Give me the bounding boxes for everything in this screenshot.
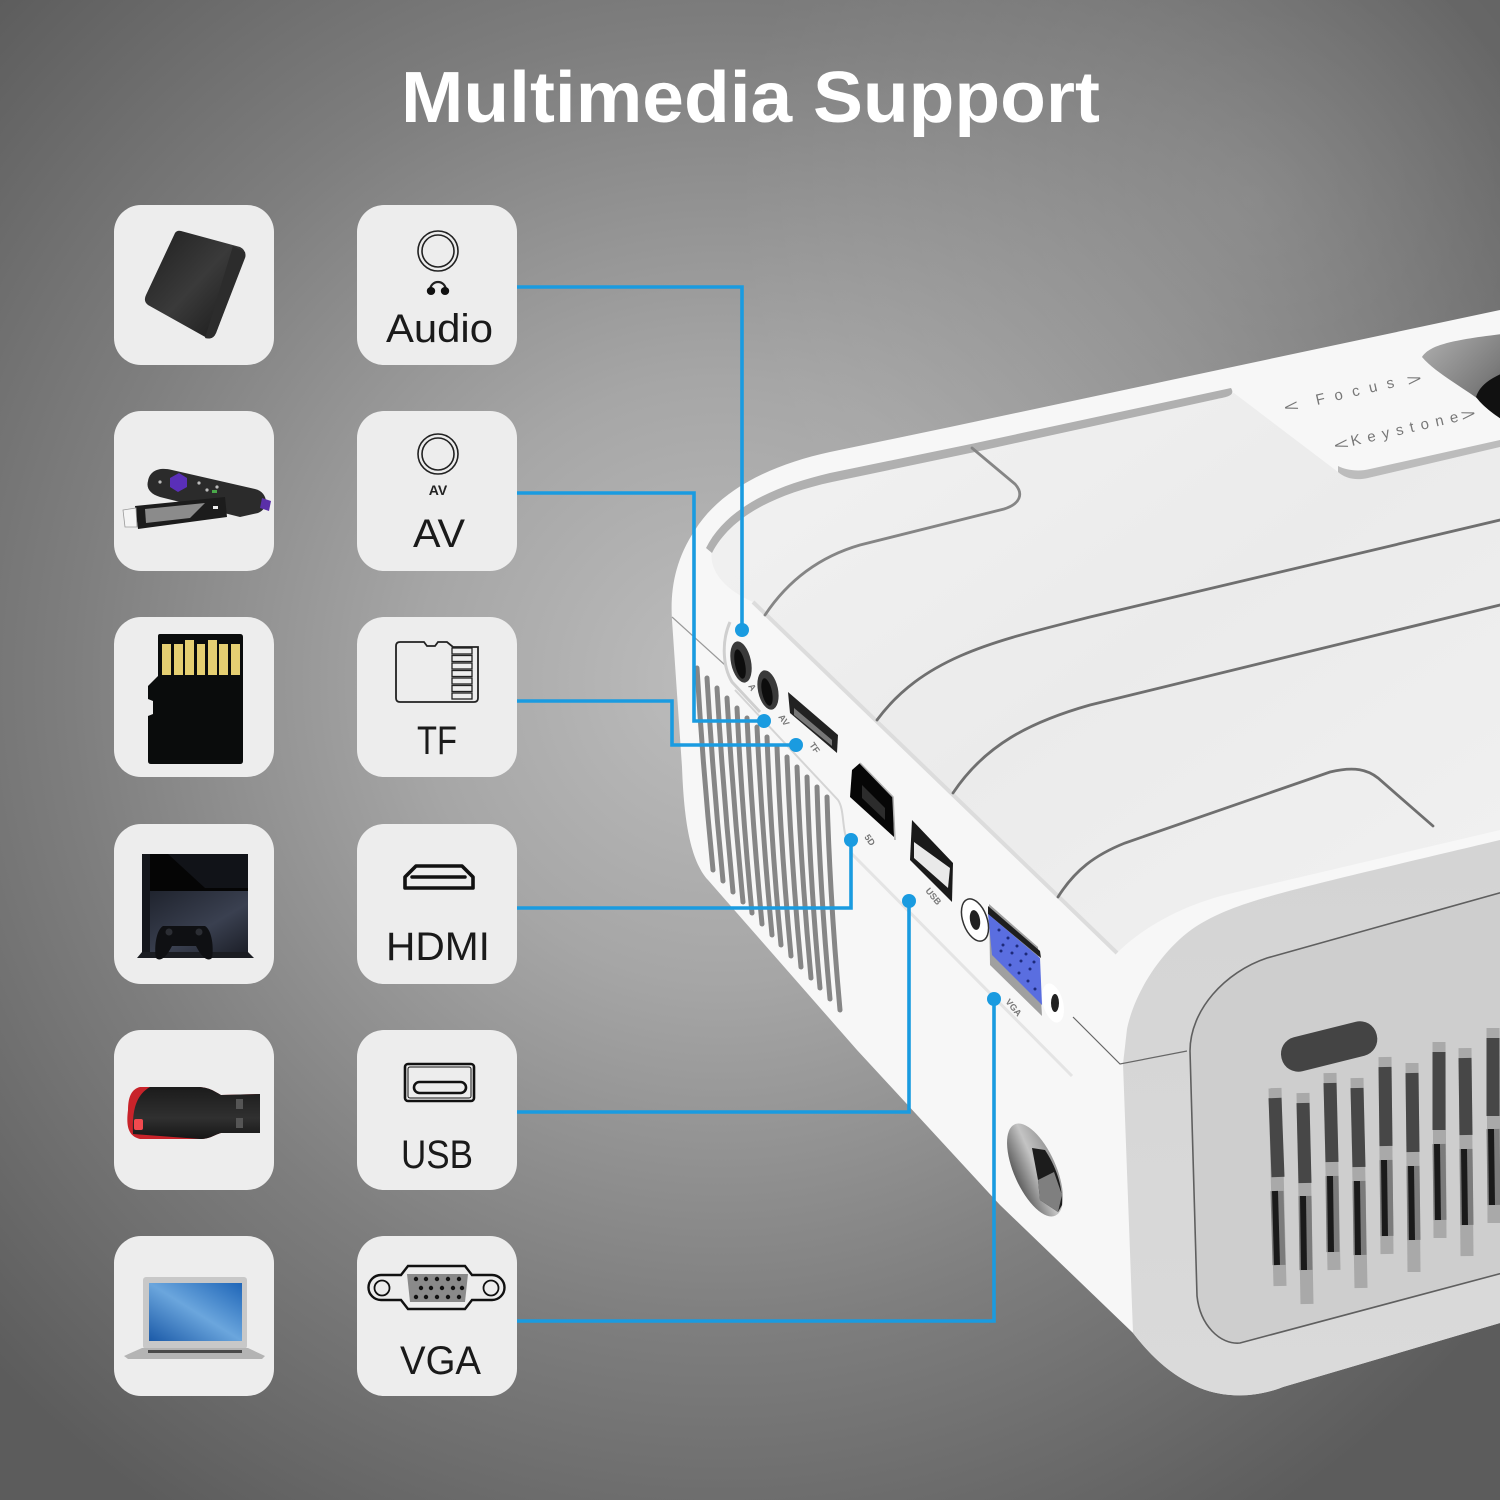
card: usb: [357, 1030, 517, 1190]
icon: av jack: [418, 434, 458, 498]
icon: av jack: AV: [429, 482, 448, 498]
card: av: [357, 411, 517, 571]
icon: tv box: [145, 231, 246, 338]
keystone controls: <: [1332, 435, 1351, 455]
recessed back panel: [1190, 890, 1500, 1343]
port labels: TF: [807, 740, 822, 756]
card: streaming stick: [114, 411, 274, 571]
lid front ridge: [753, 602, 1117, 953]
card: game console: [114, 824, 274, 984]
icon: usb port: [405, 1064, 474, 1101]
left seam: [672, 617, 725, 665]
right vent slots: [1275, 1028, 1494, 1304]
icon: remote and stick: [123, 469, 271, 529]
keystone controls: >: [1459, 405, 1478, 425]
projector: [672, 310, 1500, 1395]
card: vga: [357, 1236, 517, 1396]
port labels: [746, 682, 1024, 1019]
label: usb: USB: [401, 1133, 473, 1177]
port labels: A: [746, 682, 758, 693]
card: tv box: [114, 205, 274, 365]
label: av: AV: [413, 512, 465, 556]
connector: hdmi: [517, 833, 858, 908]
tf slot: [788, 692, 838, 753]
vga port: [988, 904, 1042, 1016]
connector: tf: [517, 701, 803, 752]
icon: micro sd card: [148, 634, 243, 764]
icon: game console: [137, 854, 254, 960]
vga left screw: [956, 895, 994, 945]
corner seam: [1073, 1017, 1187, 1064]
hdmi port: [850, 763, 895, 840]
card: sd card: [114, 617, 274, 777]
connector: audio: [517, 287, 749, 637]
focus controls: >: [1405, 370, 1424, 390]
label: vga: VGA: [400, 1339, 481, 1383]
audio jack: [727, 639, 755, 685]
lid recess band: [706, 388, 1232, 553]
front vent slats: [697, 668, 840, 1010]
focus controls: [1282, 370, 1424, 417]
speaker pill: [1277, 1018, 1381, 1075]
usb port: [910, 820, 953, 902]
label: tf: TF: [417, 719, 457, 763]
port labels: VGA: [1003, 997, 1024, 1019]
keystone controls: [1332, 405, 1478, 455]
port strip lower edge: [850, 852, 1072, 1076]
focus and keystone plate edge: [1338, 440, 1500, 479]
label: hdmi: HDMI: [386, 925, 490, 969]
keystone controls: Keystone: [1349, 409, 1460, 450]
card: laptop: [114, 1236, 274, 1396]
icon: laptop: [124, 1277, 265, 1359]
connector: av: [517, 493, 771, 728]
projector body: [672, 310, 1500, 1395]
lid seam lines: [765, 448, 1500, 897]
vent bezel edge: [735, 690, 852, 848]
card: hdmi: [357, 824, 517, 984]
card: usb flash drive: [114, 1030, 274, 1190]
card: audio: [357, 205, 517, 365]
lens: [1476, 370, 1500, 425]
right gray face: [1123, 840, 1500, 1395]
jack bezel: [724, 622, 760, 712]
connector: vga: [517, 992, 1001, 1321]
card: tf: [357, 617, 517, 777]
vga right screw: [1038, 981, 1068, 1025]
port labels: USB: [923, 886, 944, 907]
focus controls: Focus: [1314, 374, 1396, 409]
lens recess: [1422, 333, 1500, 425]
label: audio: Audio: [386, 307, 493, 351]
port labels: AV: [776, 712, 791, 728]
port labels: 5D: [862, 832, 877, 848]
foot hole: [995, 1116, 1075, 1224]
icon: tf card outline: [396, 642, 478, 702]
av jack: [754, 668, 782, 712]
icon: hdmi port: [405, 866, 473, 888]
focus controls: <: [1282, 397, 1301, 417]
icon: audio jack: [418, 231, 458, 295]
icon: usb flash drive: [127, 1087, 260, 1139]
projector lid top surface: [711, 393, 1500, 953]
icon: vga connector: [368, 1266, 504, 1309]
connector: usb: [517, 894, 916, 1112]
background highlight: [600, 0, 1500, 800]
title: Multimedia Support: [401, 58, 1100, 138]
